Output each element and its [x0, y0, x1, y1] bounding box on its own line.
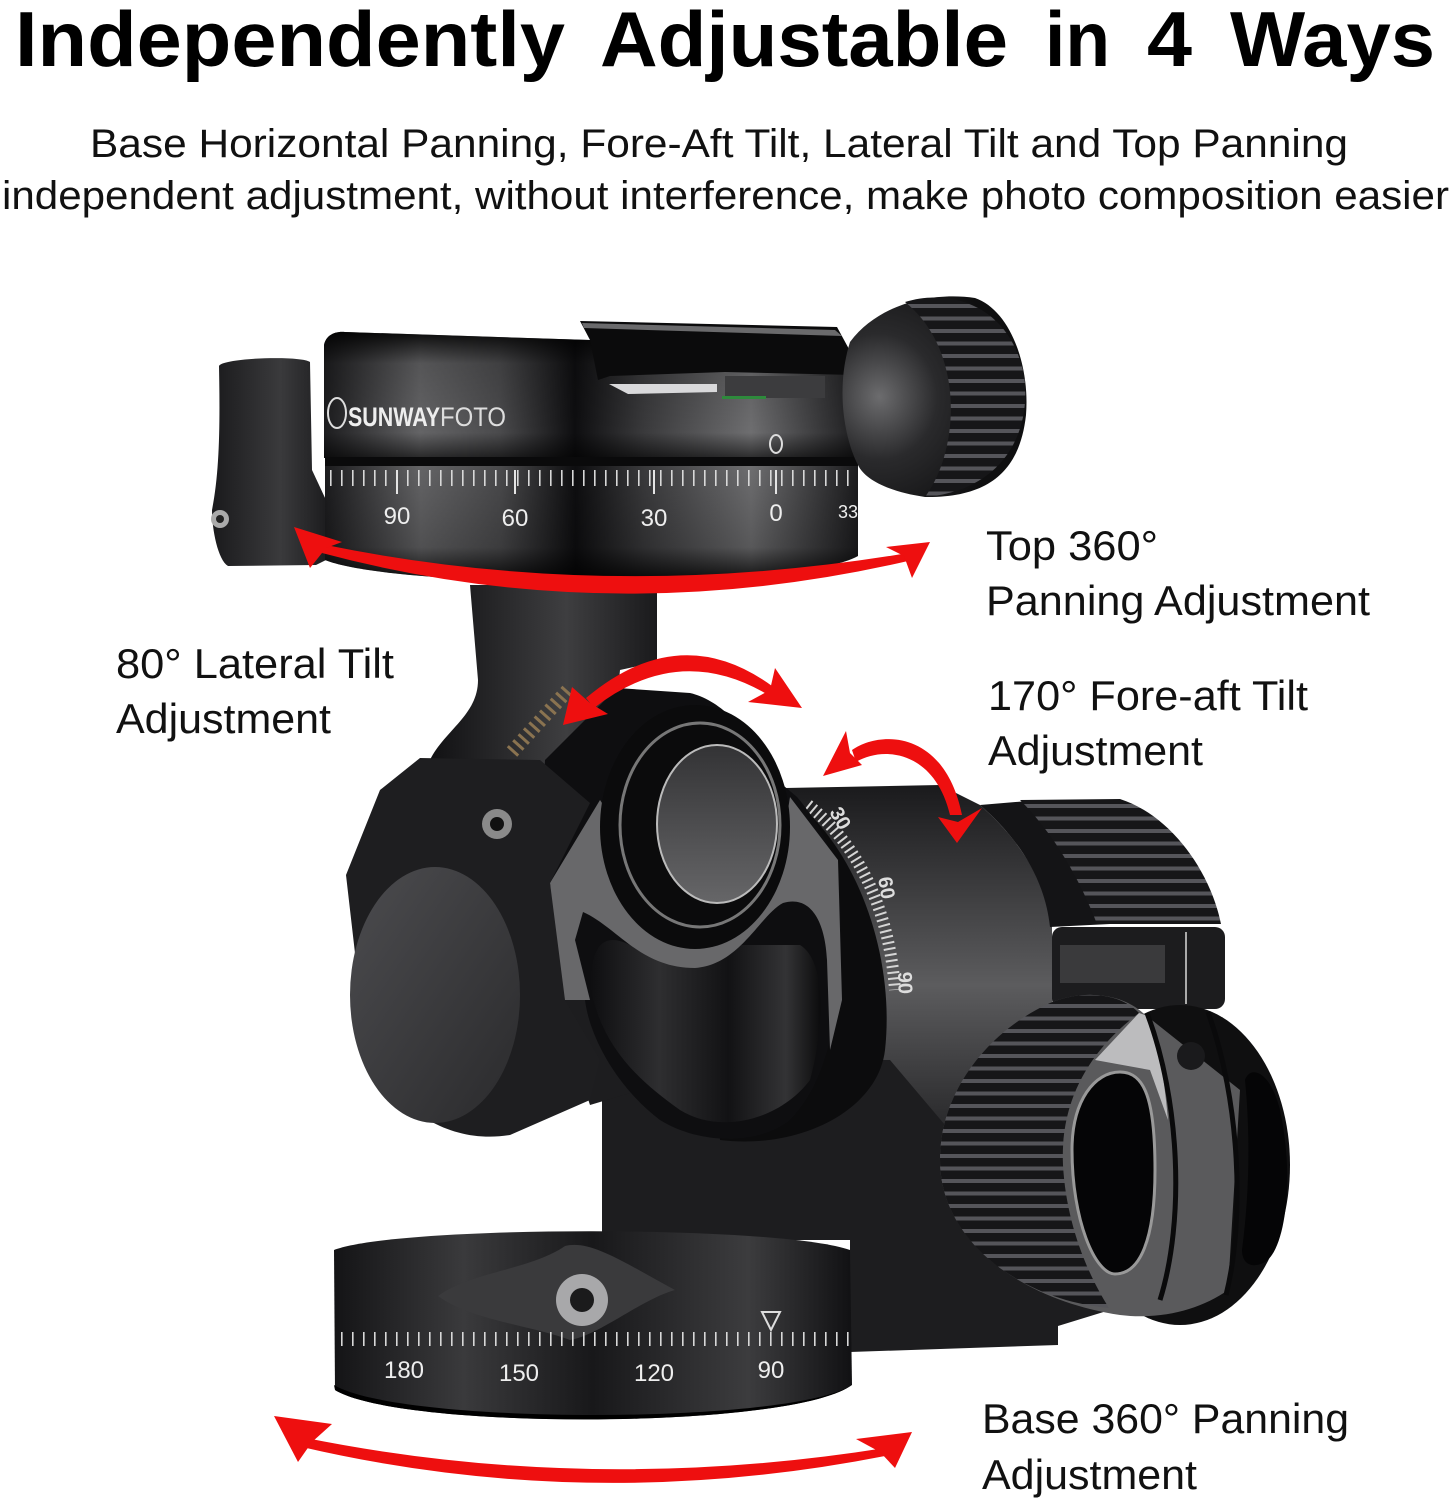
top panning scale ring: 0 — [769, 500, 783, 527]
top panning scale ring — [325, 457, 858, 582]
base panning clamp: 180 — [384, 1357, 424, 1384]
label: fore-aft tilt: Adjustment — [988, 727, 1203, 774]
label: top panning: Top 360° — [986, 522, 1158, 569]
rear connecting bar — [1052, 927, 1225, 1009]
base panning clamp: 150 — [499, 1360, 539, 1387]
label: lateral tilt — [116, 640, 394, 742]
label: lateral tilt: 80° Lateral Tilt — [116, 640, 394, 687]
camera plate — [580, 321, 856, 380]
base bracket — [602, 1060, 1110, 1352]
title — [15, 0, 1435, 83]
top clamp knob — [842, 296, 1027, 497]
side disc — [700, 797, 887, 1142]
label: top panning: Panning Adjustment — [986, 577, 1370, 624]
label: fore-aft tilt — [988, 672, 1308, 774]
base panning clamp — [334, 1231, 852, 1419]
gray yoke arms — [550, 797, 842, 1050]
base panning clamp: 120 — [634, 1360, 674, 1387]
label: fore-aft tilt: 170° Fore-aft Tilt — [988, 672, 1308, 719]
arrow: fore-aft tilt — [823, 731, 982, 843]
label: lateral tilt: Adjustment — [116, 695, 331, 742]
fore-aft drum — [780, 785, 1052, 1230]
brand logo: FOTO — [440, 402, 506, 432]
neck — [430, 585, 657, 770]
top clamp upper body — [324, 321, 858, 458]
label: base panning: Adjustment — [982, 1451, 1197, 1498]
tilt scale: 60 — [873, 875, 899, 901]
ball head product illustration — [211, 296, 1290, 1419]
tilt scale — [808, 804, 916, 994]
top clamp lever — [211, 358, 326, 566]
base panning clamp: 90 — [758, 1357, 784, 1384]
brand logo: SUNWAY — [348, 402, 440, 432]
arrow: base panning — [274, 1416, 912, 1483]
brand logo — [328, 398, 506, 432]
label: top panning — [986, 522, 1370, 624]
subtitle: independent adjustment, without interference, make photo composition easier — [2, 174, 1449, 218]
top panning scale ring: 60 — [502, 505, 528, 532]
lateral tilt round knob — [600, 705, 790, 949]
left lateral block — [346, 758, 600, 1137]
front ridged knob and lever — [940, 995, 1290, 1325]
central cradle — [540, 688, 842, 1139]
rear ridged knob — [980, 799, 1221, 927]
tilt scale: 90 — [893, 971, 916, 994]
subtitle: Base Horizontal Panning, Fore-Aft Tilt, Lateral Tilt and Top Panning — [90, 122, 1348, 166]
top panning scale ring: 33 — [838, 502, 858, 522]
arrow: top panning — [294, 527, 930, 594]
label: base panning: Base 360° Panning — [982, 1395, 1349, 1442]
gear teeth — [512, 690, 568, 752]
top panning scale ring: 90 — [384, 503, 410, 530]
top panning scale ring: 30 — [641, 505, 667, 532]
tilt scale: 30 — [825, 804, 855, 834]
label: base panning — [982, 1395, 1349, 1498]
arrow: lateral tilt — [563, 655, 802, 725]
subtitle — [2, 122, 1449, 218]
